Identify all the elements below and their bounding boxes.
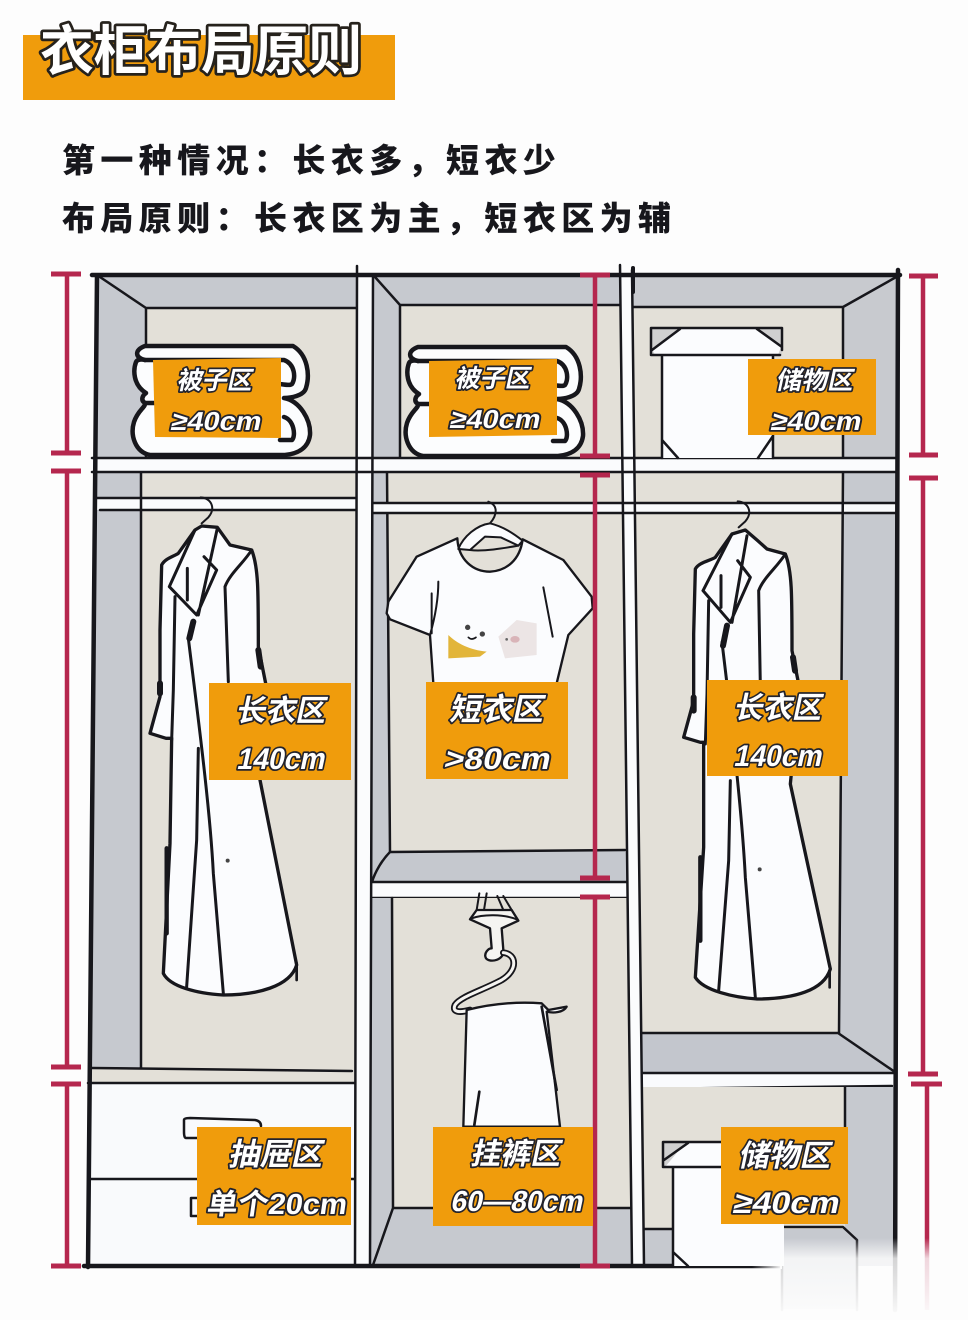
height marker middle (580, 275, 610, 1266)
column 2 upper hanging area (372, 472, 627, 882)
label: storage zone bottom: 储物区 (737, 1139, 836, 1173)
label: trousers zone: 60—80cm (449, 1185, 587, 1218)
column 3 shelf (638, 1033, 895, 1089)
label: storage zone top (748, 359, 876, 436)
print: cartoon characters (448, 620, 537, 658)
label: storage zone bottom: ≥40cm (731, 1187, 843, 1220)
label: quilt zone left: 被子区 (175, 367, 256, 395)
wardrobe structure (84, 265, 900, 1310)
column 1 top compartment (97, 275, 357, 458)
long coat right (684, 501, 830, 999)
long coat left (150, 497, 297, 995)
label: quilt zone middle: 被子区 (453, 365, 534, 393)
label: quilt zone left (153, 358, 281, 438)
title (23, 22, 395, 100)
folded quilt middle (406, 347, 583, 456)
divider 2 (620, 265, 644, 1266)
divider 1 (355, 266, 373, 1266)
column 1 drawers (88, 1083, 357, 1266)
horizontal shelf board (92, 458, 897, 472)
hanger (458, 523, 523, 550)
column 2 top compartment (373, 275, 621, 458)
column 3 lower storage (641, 1087, 895, 1310)
label: quilt zone middle: ≥40cm (448, 404, 544, 434)
drawer handles (184, 1118, 261, 1216)
height marker right (908, 276, 942, 1310)
label: drawer zone: 单个20cm (205, 1188, 350, 1221)
outer frame (84, 270, 900, 1310)
label: long clothes zone left: 140cm (235, 743, 329, 776)
subtitle: situation: 第一种情况：长衣多，短衣少 (62, 142, 561, 179)
column 2 middle shelf (365, 850, 630, 898)
trouser hanger hook (454, 953, 514, 1012)
t-shirt (387, 502, 593, 683)
label: storage zone top: 储物区 (774, 367, 857, 395)
label: long clothes zone right (707, 680, 848, 776)
label: drawer zone (197, 1127, 351, 1225)
trouser hanger clip (470, 910, 518, 961)
label: long clothes zone right: 长衣区 (732, 691, 827, 725)
label: drawer zone: 抽屉区 (227, 1137, 328, 1172)
shelf and rail lines crossing dividers (92, 458, 897, 513)
label: quilt zone middle (429, 359, 557, 437)
label: long clothes zone right: 140cm (732, 740, 826, 773)
coat hanger hook (201, 497, 212, 523)
label: storage zone bottom (721, 1127, 848, 1224)
subtitle: layout principle: 布局原则：长衣区为主，短衣区为辅 (62, 200, 676, 237)
label: short clothes zone (426, 682, 568, 779)
folded quilt left (133, 346, 310, 455)
label: short clothes zone: 短衣区 (448, 692, 549, 727)
storage box bottom (663, 1142, 784, 1266)
label: long clothes zone left (209, 683, 351, 780)
label: storage zone top: ≥40cm (769, 406, 865, 436)
hanging trousers (454, 893, 567, 1127)
coat hanger hook (738, 501, 749, 527)
column 1 hanging area (90, 472, 362, 1083)
label: trousers zone (433, 1127, 593, 1226)
column 3 hanging area (633, 472, 897, 1073)
label: trousers zone: 挂裤区 (469, 1137, 566, 1171)
column 3 top compartment (632, 275, 898, 458)
label: long clothes zone left: 长衣区 (234, 694, 331, 728)
label: quilt zone left: ≥40cm (169, 406, 265, 436)
column 2 lower hanging area (370, 898, 632, 1266)
storage box top (651, 328, 782, 458)
label: short clothes zone: >80cm (442, 743, 554, 776)
height marker left (51, 274, 81, 1266)
title: 衣柜布局原则 (40, 22, 362, 82)
bottom right fade (752, 1238, 968, 1320)
